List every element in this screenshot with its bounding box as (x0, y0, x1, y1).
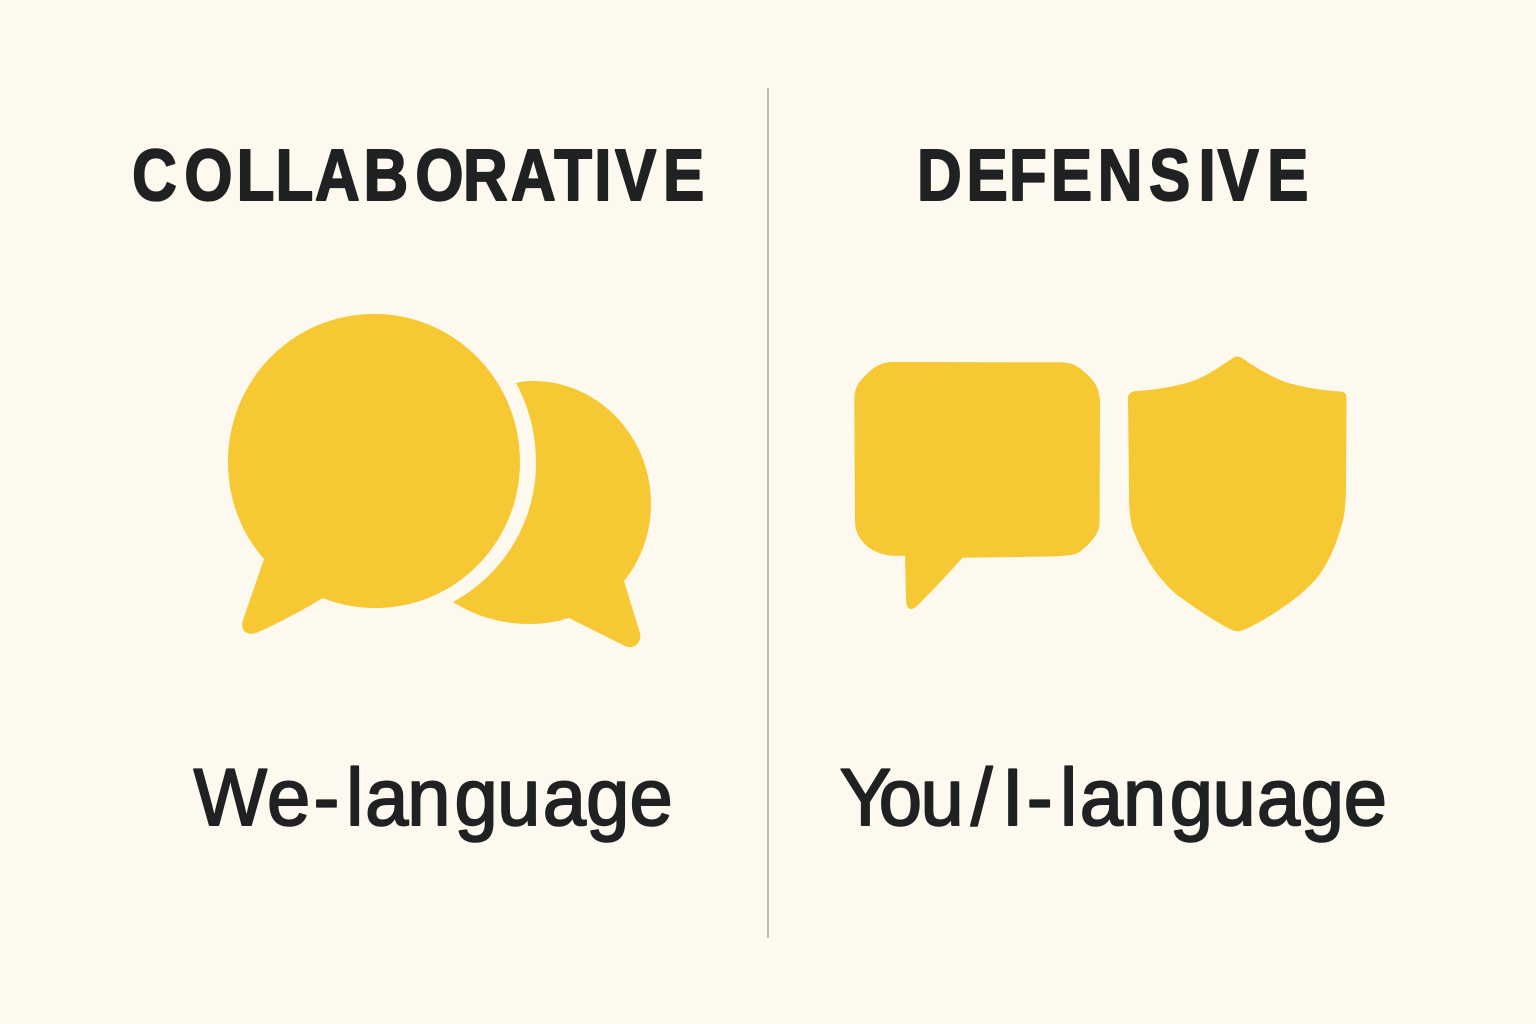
large speech bubble (228, 314, 520, 634)
panel: defensive (840, 135, 1387, 843)
small speech bubble (453, 381, 651, 647)
label: we-language: We-language (194, 753, 673, 843)
heading: defensive: DEFENSIVE (917, 135, 1308, 216)
heading: collaborative: COLLABORATIVE (132, 135, 704, 216)
shield (1128, 356, 1346, 631)
icon: speech bubble and shield (854, 356, 1346, 631)
panel: collaborative (132, 135, 704, 843)
label: you/i-language: You/I-language (840, 753, 1387, 843)
icon: overlapping speech bubbles (228, 314, 651, 647)
square speech bubble (854, 362, 1100, 609)
